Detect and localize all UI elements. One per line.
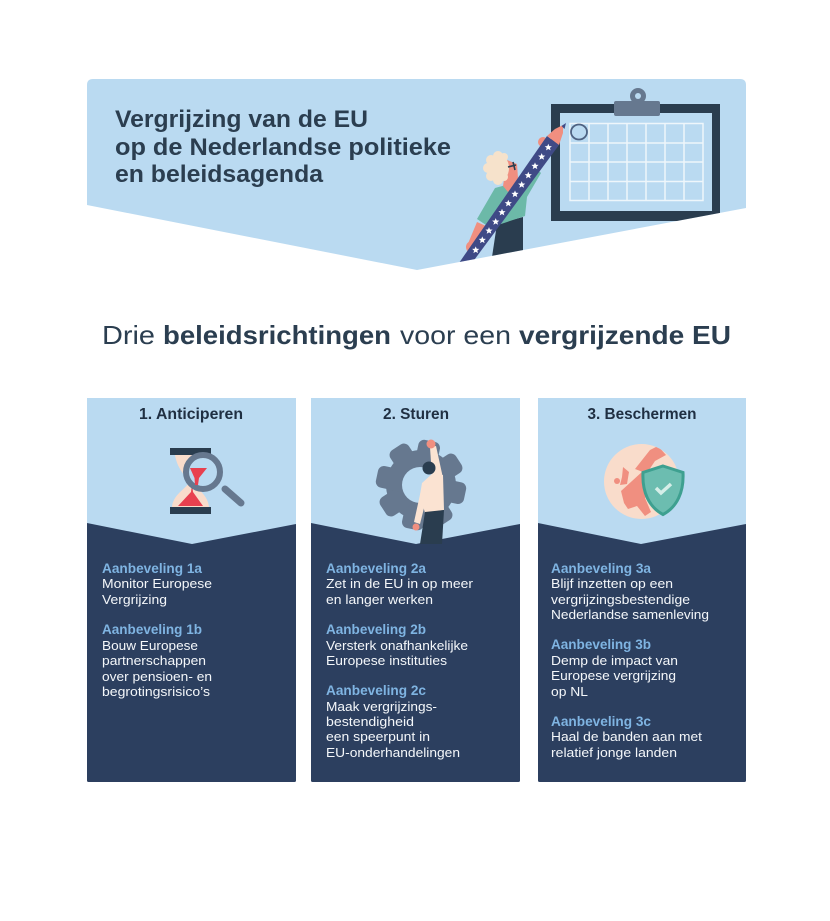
recommendations 2: Europese instituties — [326, 653, 447, 668]
recommendations 3: vergrijzingsbestendige — [551, 592, 690, 607]
heading: beleidsrichtingen — [163, 320, 391, 350]
recommendations 3: Blijf inzetten op een — [551, 576, 673, 591]
heading — [102, 320, 731, 350]
recommendations 1: begrotingsrisico’s — [102, 684, 210, 699]
recommendations 2: Aanbeveling 2c — [326, 683, 426, 698]
recommendations 2: bestendigheid — [326, 714, 414, 729]
banner background — [87, 79, 746, 270]
panel: header banner — [87, 79, 746, 270]
banner title: en beleidsagenda — [115, 161, 324, 188]
card heading: 2. Sturen — [383, 406, 449, 423]
card background — [538, 398, 746, 782]
panel: 2. Sturen — [311, 398, 520, 782]
recommendations 1: Vergrijzing — [102, 592, 167, 607]
recommendations 1: Bouw Europese — [102, 638, 198, 653]
heading: voor een — [400, 320, 511, 350]
recommendations 2: een speerpunt in — [326, 729, 430, 744]
recommendations 2: Versterk onafhankelijke — [326, 638, 468, 653]
recommendations 2: en langer werken — [326, 592, 433, 607]
banner title: Vergrijzing van de EU — [115, 106, 368, 133]
heading: Drie — [102, 320, 155, 350]
card heading: 1. Anticiperen — [139, 406, 243, 423]
icon: hourglass with magnifier — [170, 448, 241, 514]
recommendations 1 — [102, 561, 212, 699]
recommendations 2 — [326, 561, 474, 760]
recommendations 3: relatief jonge landen — [551, 745, 677, 760]
banner title — [115, 106, 451, 188]
recommendations 1: Aanbeveling 1a — [102, 561, 202, 576]
heading: vergrijzende EU — [519, 320, 731, 350]
recommendations 3: Haal de banden aan met — [551, 729, 702, 744]
recommendations 3: Aanbeveling 3b — [551, 637, 651, 652]
icon: calendar clipboard — [551, 88, 720, 221]
recommendations 2: Aanbeveling 2b — [326, 622, 426, 637]
card background — [87, 398, 296, 782]
banner title: op de Nederlandse politieke — [115, 134, 451, 161]
recommendations 2: Aanbeveling 2a — [326, 561, 426, 576]
recommendations 3 — [551, 561, 709, 760]
recommendations 1: partnerschappen — [102, 653, 206, 668]
recommendations 3: op NL — [551, 684, 588, 699]
recommendations 2: EU-onderhandelingen — [326, 745, 460, 760]
card heading: 3. Beschermen — [588, 406, 696, 423]
icon: gear with person — [368, 432, 474, 544]
recommendations 3: Aanbeveling 3a — [551, 561, 651, 576]
icon: Europe map with shield — [604, 444, 683, 519]
recommendations 3: Aanbeveling 3c — [551, 714, 651, 729]
icon: person with pencil — [459, 123, 566, 263]
recommendations 1: Aanbeveling 1b — [102, 622, 202, 637]
recommendations 3: Demp de impact van — [551, 653, 678, 668]
recommendations 3: Europese vergrijzing — [551, 668, 676, 683]
panel: 3. Beschermen — [538, 398, 746, 782]
recommendations 2: Maak vergrijzings- — [326, 699, 437, 714]
recommendations 3: Nederlandse samenleving — [551, 607, 709, 622]
recommendations 2: Zet in de EU in op meer — [326, 576, 474, 591]
card background — [311, 398, 520, 782]
recommendations 1: over pensioen- en — [102, 669, 212, 684]
recommendations 1: Monitor Europese — [102, 576, 212, 591]
panel: 1. Anticiperen — [87, 398, 296, 782]
